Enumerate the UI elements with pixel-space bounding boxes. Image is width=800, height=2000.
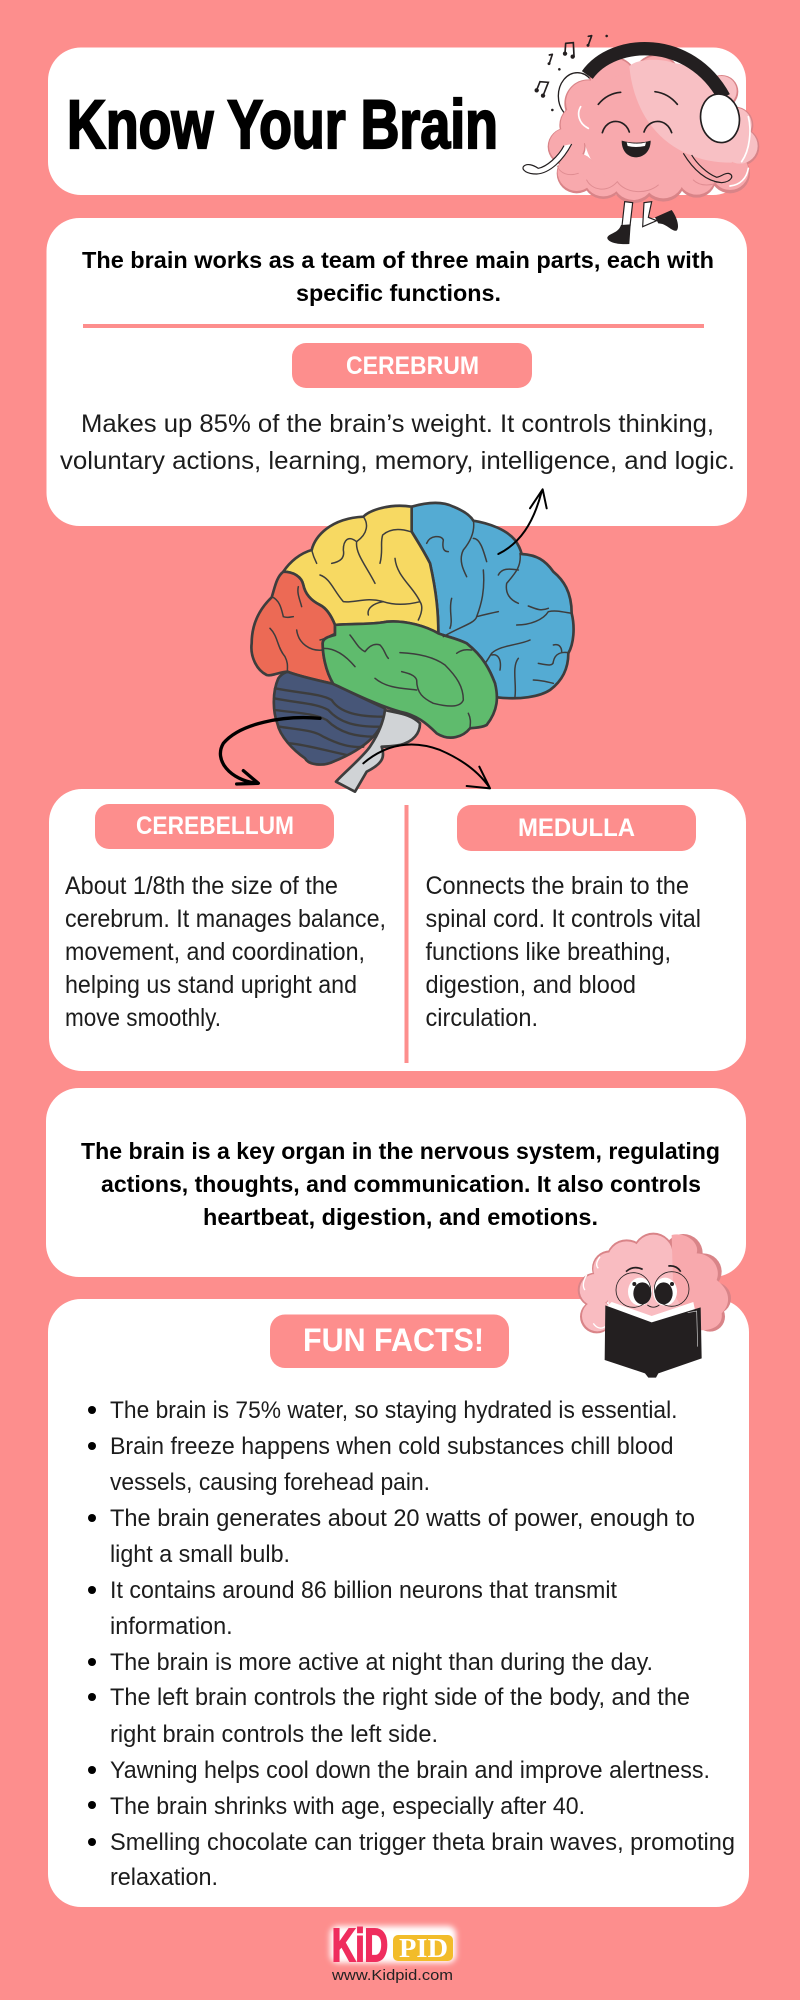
mascot: brain with headphones [523,35,759,244]
left ear cup [558,73,596,119]
arms [523,144,572,174]
intro text: specific functions. [296,280,501,306]
pill: medulla [457,805,696,851]
cerebrum description [60,410,735,475]
lobe: red [251,572,335,684]
brain folds [270,517,572,755]
lobe: cerebellum [274,672,385,765]
pill: fun facts [270,1314,509,1368]
right ear cup [697,92,743,145]
fun facts list: The brain is more active at night than during the day. [110,1649,653,1676]
panel: nervous system summary: The brain is a key organ in the nervous system, regulating [81,1138,720,1164]
brain head [578,1233,731,1333]
fun facts list: The brain is 75% water, so staying hydrated is essential. [110,1397,678,1424]
fun facts list: It contains around 86 billion neurons that transmit [110,1577,617,1604]
arrow: to cerebellum [220,718,320,784]
title: Know Your Brain [67,86,498,163]
brain body [548,54,759,203]
glasses and eyes [616,1266,689,1307]
medulla text: circulation. [426,1004,538,1032]
cerebellum text [65,872,386,1032]
pill: cerebellum [95,804,334,849]
fun facts list: vessels, causing forehead pain. [110,1469,430,1496]
medulla text: functions like breathing, [426,938,671,966]
fun facts list: The left brain controls the right side of the body, and the [110,1684,690,1711]
face [598,92,677,157]
brain diagram [251,503,574,792]
fun facts list: information. [110,1613,233,1640]
panel: title banner [48,48,746,195]
pill: cerebellum: CEREBELLUM [136,812,294,840]
cerebrum description: Makes up 85% of the brain’s weight. It controls thinking, [81,410,714,438]
lobe: yellow frontal [283,506,438,633]
intro text [82,247,714,306]
shoes [607,210,678,244]
fun facts list: The brain generates about 20 watts of power, enough to [110,1505,695,1532]
logo: Kidpid: PID [399,1933,448,1963]
mascot: brain reading a book [578,1233,731,1378]
fun facts list: Yawning helps cool down the brain and improve alertness. [110,1757,710,1784]
fun facts list: The brain shrinks with age, especially after 40. [110,1793,585,1820]
lobe: medulla stem [336,710,420,792]
medulla text: digestion, and blood [426,971,636,999]
panel: cerebellum and medulla [49,789,746,1071]
lobe: blue parietal [412,503,574,698]
medulla text [426,872,701,1032]
pill: cerebrum: CEREBRUM [346,352,479,380]
cerebellum text: move smoothly. [65,1004,221,1032]
cerebellum text: helping us stand upright and [65,971,357,999]
logo: Kidpid [330,1919,456,1984]
cerebrum description: voluntary actions, learning, memory, intelligence, and logic. [60,447,735,475]
fun facts list [88,1397,735,1891]
book [605,1302,702,1378]
pill: fun facts: FUN FACTS! [303,1322,484,1358]
bottom scallops [557,166,720,192]
headband [587,49,724,97]
fun facts list: relaxation. [110,1864,218,1891]
highlight [629,60,758,164]
lobe: green temporal [323,621,497,738]
panel: nervous system summary [46,1088,746,1277]
arrow: to medulla [363,745,490,788]
pill: medulla: MEDULLA [518,814,635,842]
cerebellum text: About 1/8th the size of the [65,872,338,900]
fun facts list: Smelling chocolate can trigger theta brain waves, promoting [110,1829,735,1856]
cerebellum text: cerebrum. It manages balance, [65,905,386,933]
logo: Kidpid: www.Kidpid.com [331,1967,453,1984]
arrow: to cerebrum [498,489,547,554]
legs [622,202,657,227]
logo: Kidpid: KiD [332,1919,388,1971]
fun facts list: light a small bulb. [110,1541,290,1568]
pill: cerebrum [292,343,532,388]
medulla text: spinal cord. It controls vital [426,905,701,933]
music notes [535,35,608,111]
panel: nervous system summary: actions, thoughts, and communication. It also controls [101,1171,701,1197]
panel: cerebrum [46,218,747,526]
fun facts list: Brain freeze happens when cold substances chill blood [110,1433,674,1460]
panel: nervous system summary: heartbeat, digestion, and emotions. [203,1204,598,1230]
cerebellum text: movement, and coordination, [65,938,365,966]
intro text: The brain works as a team of three main parts, each with [82,247,714,273]
panel: fun facts [48,1299,749,1907]
fun facts list: right brain controls the left side. [110,1721,438,1748]
medulla text: Connects the brain to the [426,872,689,900]
